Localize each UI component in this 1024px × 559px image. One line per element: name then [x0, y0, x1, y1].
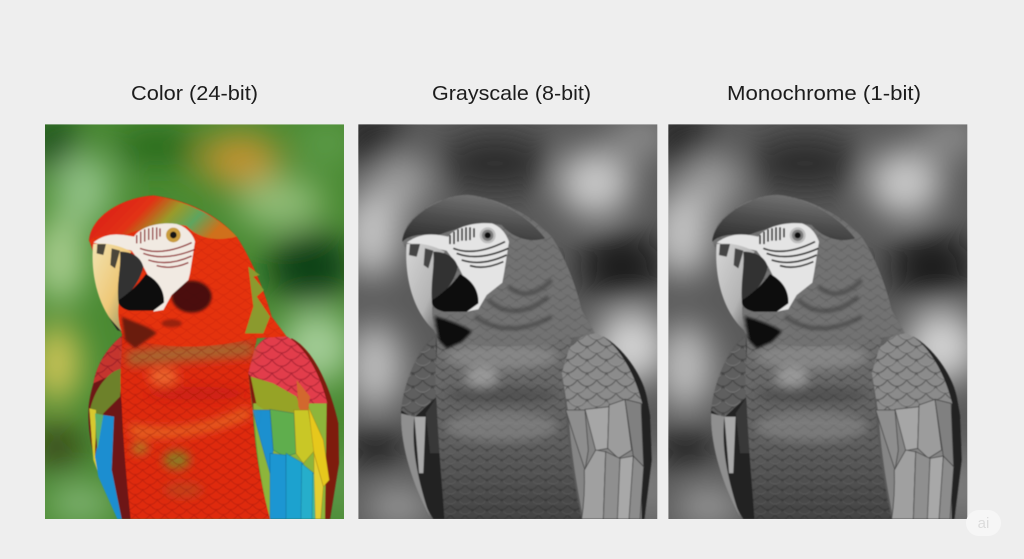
head: [89, 195, 287, 348]
panel: grayscale parrot photo: [338, 110, 672, 527]
heading: Grayscale (8-bit): Grayscale (8-bit): [432, 82, 591, 105]
right wing: [248, 333, 339, 519]
badge: ai watermark: [966, 510, 1001, 536]
heading: Monochrome (1-bit): Monochrome (1-bit): [727, 82, 921, 105]
face patch: [93, 223, 195, 312]
panel: monochrome parrot photo: [648, 110, 982, 527]
badge: ai watermark: ai: [978, 515, 989, 532]
heading: Color (24-bit): Color (24-bit): [131, 82, 258, 105]
beak: [93, 243, 164, 332]
infographic: bit-depth comparison: [45, 85, 988, 528]
left wing: [88, 336, 131, 519]
body: [120, 327, 270, 519]
panel: color parrot photo: [45, 124, 344, 519]
